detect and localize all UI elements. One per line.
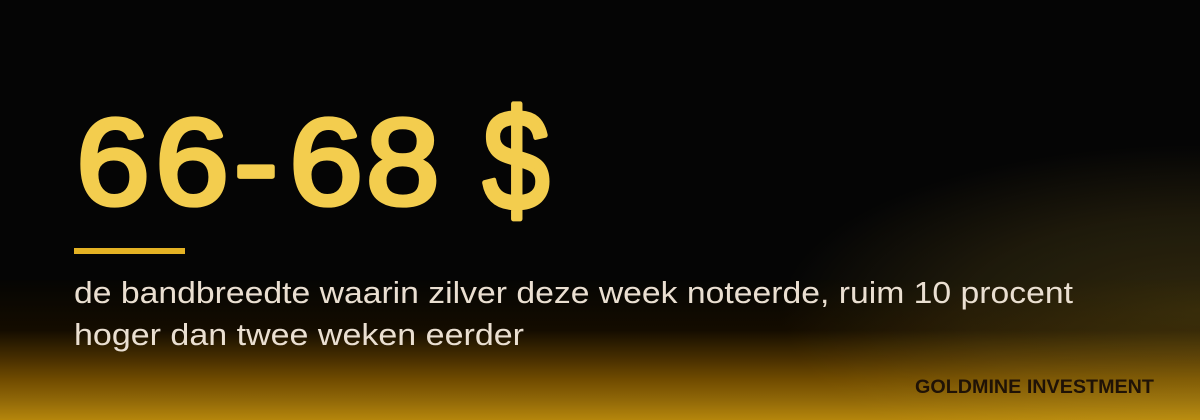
source credit: GOLDMINE INVESTMENT — [915, 377, 1154, 398]
headline: silver price range: 66-68 — [76, 94, 439, 230]
accent rule — [74, 248, 185, 254]
description text: de bandbreedte waarin zilver deze week noteerde, ruim 10 procent — [74, 275, 1073, 310]
description text — [74, 275, 1073, 352]
headline: silver price range — [76, 80, 549, 239]
description text: hoger dan twee weken eerder — [74, 317, 524, 352]
headline: silver price range: $ — [483, 80, 549, 239]
